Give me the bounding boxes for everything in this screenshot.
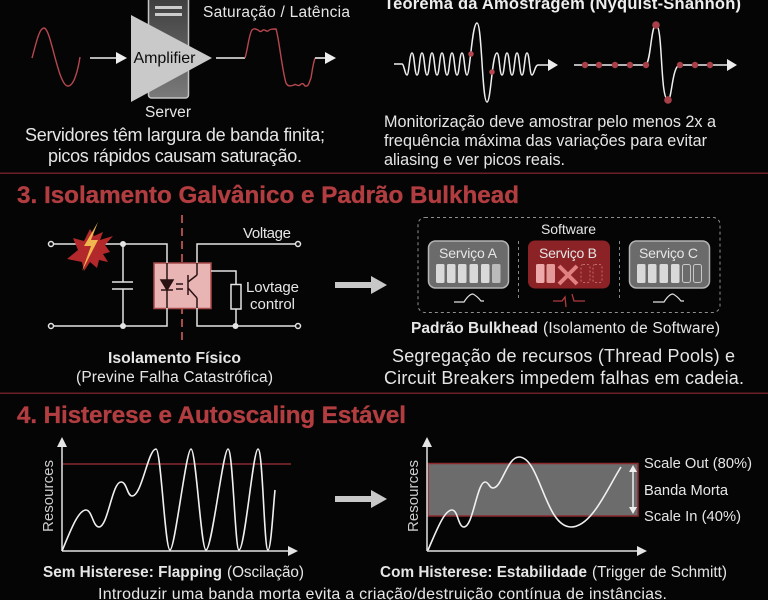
circuit junctions [120, 241, 238, 329]
arrow: isolation to bulkhead [335, 276, 387, 294]
text: amplifier explanation: Servidores têm largura de banda finita; [25, 125, 325, 145]
stable curve [428, 457, 621, 550]
panel: amplifier saturation [25, 0, 350, 166]
caption: physical isolation: Isolamento Físico [108, 350, 241, 367]
panel: physical isolation circuit [48, 215, 300, 386]
caption: bulkhead: (Isolamento de Software) [543, 320, 720, 337]
text: bulkhead explanation: Circuit Breakers impedem falhas em cadeia. [384, 368, 744, 388]
text: sampling explanation [384, 113, 716, 169]
heading: section 3: 3. Isolamento Galvânico e Padrão Bulkhead [17, 182, 519, 209]
axis label: Resources [40, 460, 57, 532]
panel: chart with hysteresis [380, 437, 752, 581]
axes [57, 437, 298, 556]
text: sampling explanation: aliasing e ver picos reais. [384, 151, 565, 169]
text: bulkhead explanation [384, 346, 744, 388]
text: amplifier explanation: picos rápidos causam saturação. [48, 146, 302, 166]
icon: lightning surge [67, 222, 113, 271]
caption: physical isolation: (Previne Falha Catastrófica) [76, 369, 273, 386]
flapping curve [62, 449, 275, 551]
arrow: input [90, 52, 127, 64]
service B failed [528, 240, 610, 307]
caption: without hysteresis: (Oscilação) [227, 564, 304, 581]
panel: sampling theorem [384, 0, 741, 169]
threshold labels [644, 456, 752, 525]
caption: physical isolation [76, 350, 273, 386]
threshold line [63, 463, 291, 465]
text: sampling explanation: frequência máxima das variações para evitar [384, 132, 708, 150]
caption: without hysteresis [43, 564, 304, 581]
chart: raw signal with spike [394, 23, 558, 102]
service A [428, 241, 508, 302]
server label: Server [145, 104, 191, 121]
caption: with hysteresis: Com Histerese: Estabilidade [380, 564, 587, 581]
service C [630, 241, 710, 302]
saturation label: Saturação / Latência [203, 4, 350, 21]
circuit wiring [48, 242, 300, 328]
axes [422, 437, 647, 556]
arrow: unstable to stable [335, 490, 387, 508]
icon: input sine wave [32, 28, 80, 86]
voltage control label [246, 279, 299, 313]
caption: bulkhead [411, 320, 720, 337]
double arrow: dead band [629, 465, 637, 514]
heading: section 4: 4. Histerese e Autoscaling Estável [17, 402, 406, 429]
text: bulkhead explanation: Segregação de recursos (Thread Pools) e [392, 346, 735, 366]
chart: sampled signal [574, 21, 737, 104]
isolation barrier [181, 215, 183, 343]
software boundary [418, 218, 720, 312]
icon: amplifier triangle [131, 15, 212, 102]
optocoupler internals [161, 263, 197, 308]
caption: bulkhead: Padrão Bulkhead [411, 320, 538, 337]
panel: bulkhead pattern [384, 218, 744, 388]
voltage control label: Lovtage [246, 279, 299, 296]
software label: Software [541, 221, 596, 237]
caption: without hysteresis: Sem Histerese: Flapping [43, 564, 222, 581]
service C: Serviço C [639, 245, 698, 261]
dead band [428, 464, 638, 516]
amplifier label: Amplifier [134, 50, 196, 67]
caption: with hysteresis: (Trigger de Schmitt) [592, 564, 727, 581]
optocoupler body [154, 263, 211, 308]
voltage label: Voltage [243, 225, 291, 242]
threshold labels: Banda Morta [644, 483, 729, 499]
service A: Serviço A [439, 245, 498, 261]
axis label: Resources [405, 460, 422, 532]
text: amplifier explanation [25, 125, 325, 166]
caption: with hysteresis [380, 564, 727, 581]
text: sampling explanation: Monitorização deve amostrar pelo menos 2x a [384, 113, 716, 131]
icon: server [148, 0, 188, 98]
service B failed: Serviço B [539, 245, 597, 261]
voltage control label: control [250, 296, 295, 313]
threshold labels: Scale Out (80%) [644, 456, 752, 472]
threshold labels: Scale In (40%) [644, 509, 741, 525]
panel: chart without hysteresis [40, 437, 304, 581]
saturated output wave [216, 29, 336, 86]
